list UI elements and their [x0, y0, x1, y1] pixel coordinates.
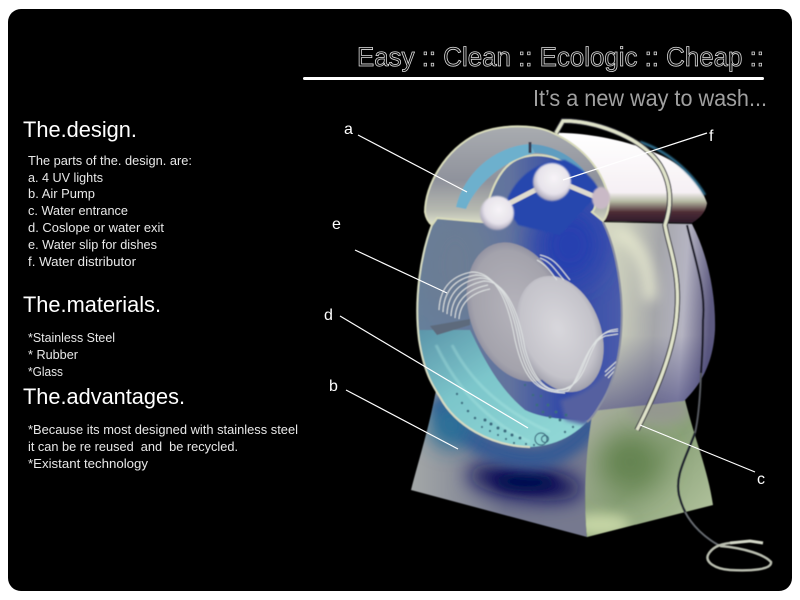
- callout f: f: [709, 128, 714, 145]
- callout b: b: [329, 378, 338, 395]
- dish shapes: [448, 228, 619, 404]
- UV light strip: [456, 144, 535, 209]
- air pump tube left: [508, 185, 545, 204]
- section: the design: [23, 117, 192, 269]
- list: parts of the design: e. Water slip for dishes: [28, 238, 157, 252]
- list: advantages: *Existant technology: [28, 457, 149, 471]
- list: materials: * Rubber: [28, 348, 78, 362]
- title rule: [303, 77, 764, 80]
- air pump tube right: [560, 182, 598, 198]
- callout a: a: [344, 121, 353, 138]
- list: advantages: it can be re reused and be recycled.: [28, 440, 238, 454]
- list: advantages: [28, 423, 298, 471]
- list: parts of the design: The parts of the. design. are:: [28, 154, 192, 168]
- drum body: [593, 222, 715, 411]
- callout d: d: [324, 307, 333, 324]
- list: materials: *Stainless Steel: [28, 331, 115, 345]
- list: materials: *Glass: [28, 365, 63, 379]
- list: parts of the design: a. 4 UV lights: [28, 171, 103, 185]
- drum interior: [412, 150, 622, 449]
- section: the advantages: [23, 384, 298, 471]
- air pump ball left: [480, 196, 514, 230]
- callout f: [563, 128, 714, 180]
- machine artwork: [411, 121, 771, 570]
- opening rim: [417, 222, 530, 447]
- callout d: [324, 307, 528, 428]
- callout e: [332, 216, 447, 293]
- heading: the materials: The.materials.: [23, 292, 161, 317]
- washing machine illustration: [324, 121, 771, 570]
- handle tube: [556, 121, 677, 430]
- callout c: [640, 425, 765, 488]
- callout c: c: [757, 471, 765, 488]
- power cable: [678, 225, 771, 570]
- heading: the design: The.design.: [23, 117, 137, 142]
- wire rail: [430, 319, 470, 335]
- list: materials: [28, 331, 115, 379]
- callout a: [344, 121, 467, 192]
- hood: [425, 126, 707, 235]
- callout e: e: [332, 216, 341, 233]
- water slip wires: [439, 255, 618, 393]
- title: Easy :: Clean :: Ecologic :: Cheap ::: [357, 42, 764, 72]
- list: parts of the design: b. Air Pump: [28, 187, 95, 201]
- list: advantages: *Because its most designed with stainless steel: [28, 423, 298, 437]
- list: parts of the design: [28, 154, 192, 269]
- heading: the advantages: The.advantages.: [23, 384, 185, 409]
- callout lines and letters: [324, 121, 765, 488]
- list: parts of the design: f. Water distributor: [28, 255, 136, 269]
- subtitle: It’s a new way to wash...: [533, 85, 767, 111]
- section: the materials: [23, 292, 161, 379]
- blue cavity under hood: [505, 160, 600, 235]
- callout b: [329, 378, 458, 449]
- air pump ball middle: [533, 163, 571, 201]
- list: parts of the design: c. Water entrance: [28, 204, 128, 218]
- air pump ball right: [592, 187, 610, 209]
- list: parts of the design: d. Coslope or water exit: [28, 221, 165, 235]
- base stand: [411, 385, 713, 537]
- water exit perforations: [456, 384, 574, 446]
